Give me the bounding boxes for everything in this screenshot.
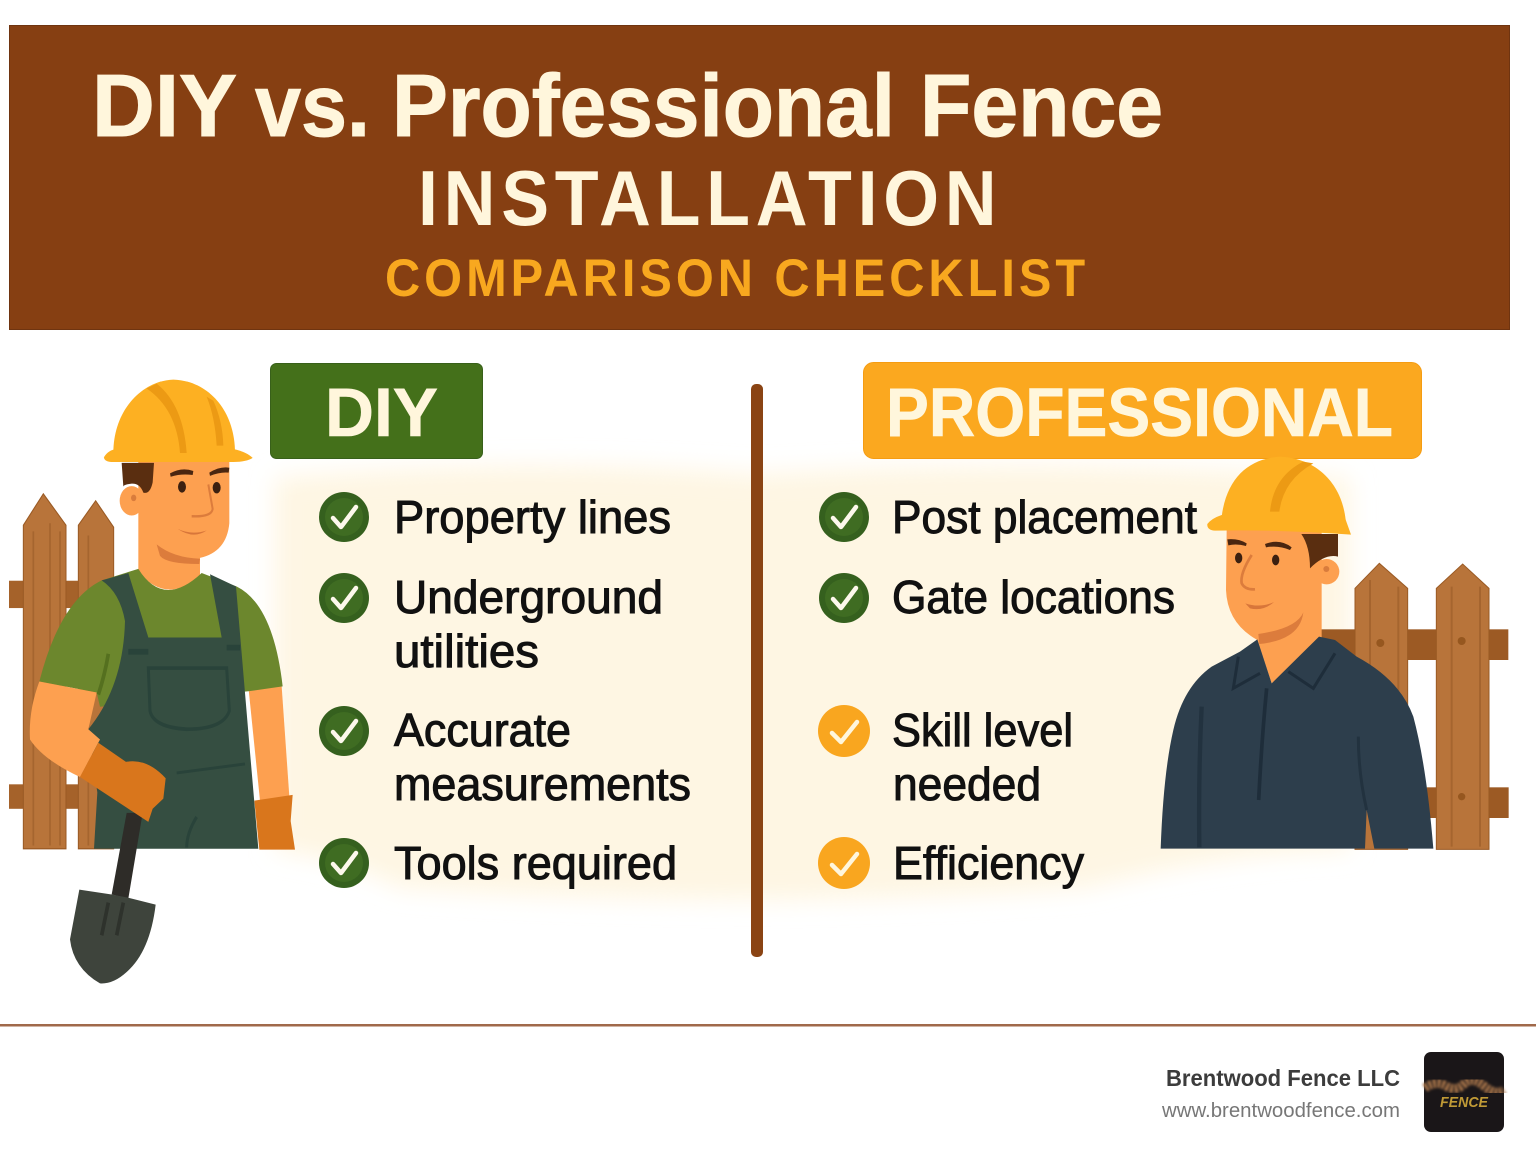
hard hat bbox=[104, 380, 253, 462]
DIY badge: DIY bbox=[325, 374, 438, 451]
DIY badge bbox=[270, 364, 482, 458]
check icon 4 bbox=[319, 838, 369, 888]
illustration: DIY worker with fence and shovel bbox=[9, 380, 295, 983]
item: skill level needed: needed bbox=[893, 758, 1041, 810]
title: Professional bbox=[392, 56, 895, 155]
title: DIY bbox=[92, 56, 237, 155]
check icon 2 bbox=[819, 573, 869, 623]
Professional checklist bbox=[818, 491, 1197, 889]
glove on hand bbox=[80, 743, 166, 822]
item: post placement: Post placement bbox=[892, 491, 1197, 543]
item: underground utilities: utilities bbox=[394, 625, 539, 677]
hard hat bbox=[1207, 457, 1351, 535]
item: gate locations: Gate locations bbox=[892, 571, 1175, 623]
shovel bbox=[70, 813, 156, 983]
item: efficiency: Efficiency bbox=[893, 837, 1084, 889]
footer company name: Brentwood Fence LLC bbox=[1166, 1065, 1400, 1091]
orange check icon 3 bbox=[818, 705, 870, 757]
DIY checklist bbox=[319, 491, 691, 889]
overalls bbox=[88, 573, 258, 849]
orange check icon 4 bbox=[818, 837, 870, 889]
green shirt bbox=[39, 569, 283, 707]
Professional badge: PROFESSIONAL bbox=[886, 374, 1393, 451]
center divider bbox=[751, 384, 763, 957]
background glow panel bbox=[275, 466, 1350, 900]
item: accurate measurements: measurements bbox=[394, 758, 691, 810]
check icon 3 bbox=[319, 706, 369, 756]
right arm and glove bbox=[248, 686, 295, 850]
left fence bbox=[9, 494, 114, 849]
title: vs. bbox=[255, 56, 370, 155]
item: accurate measurements: Accurate bbox=[394, 704, 571, 756]
footer logo bbox=[1424, 1052, 1504, 1132]
subtitle: comparison checklist: COMPARISON CHECKLIST bbox=[385, 248, 1085, 307]
check icon 1 bbox=[319, 492, 369, 542]
item: skill level needed: Skill level bbox=[892, 704, 1073, 756]
title: Fence bbox=[920, 56, 1163, 155]
check icon 2 bbox=[319, 573, 369, 623]
neck and head bbox=[120, 462, 229, 590]
subtitle: installation: INSTALLATION bbox=[418, 154, 997, 242]
check icon 1 bbox=[819, 492, 869, 542]
item: property lines: Property lines bbox=[394, 491, 671, 543]
header banner bbox=[10, 26, 1510, 330]
navy shirt bbox=[1161, 637, 1433, 849]
left arm bbox=[30, 682, 100, 777]
illustration: professional with fence bbox=[1161, 457, 1509, 849]
footer logo: FENCE bbox=[1440, 1094, 1489, 1111]
item: underground utilities: Underground bbox=[394, 571, 663, 623]
footer website: www.brentwoodfence.com bbox=[1161, 1100, 1400, 1122]
head and neck bbox=[1226, 530, 1339, 683]
item: tools required: Tools required bbox=[394, 837, 677, 889]
right fence bbox=[1318, 563, 1509, 849]
